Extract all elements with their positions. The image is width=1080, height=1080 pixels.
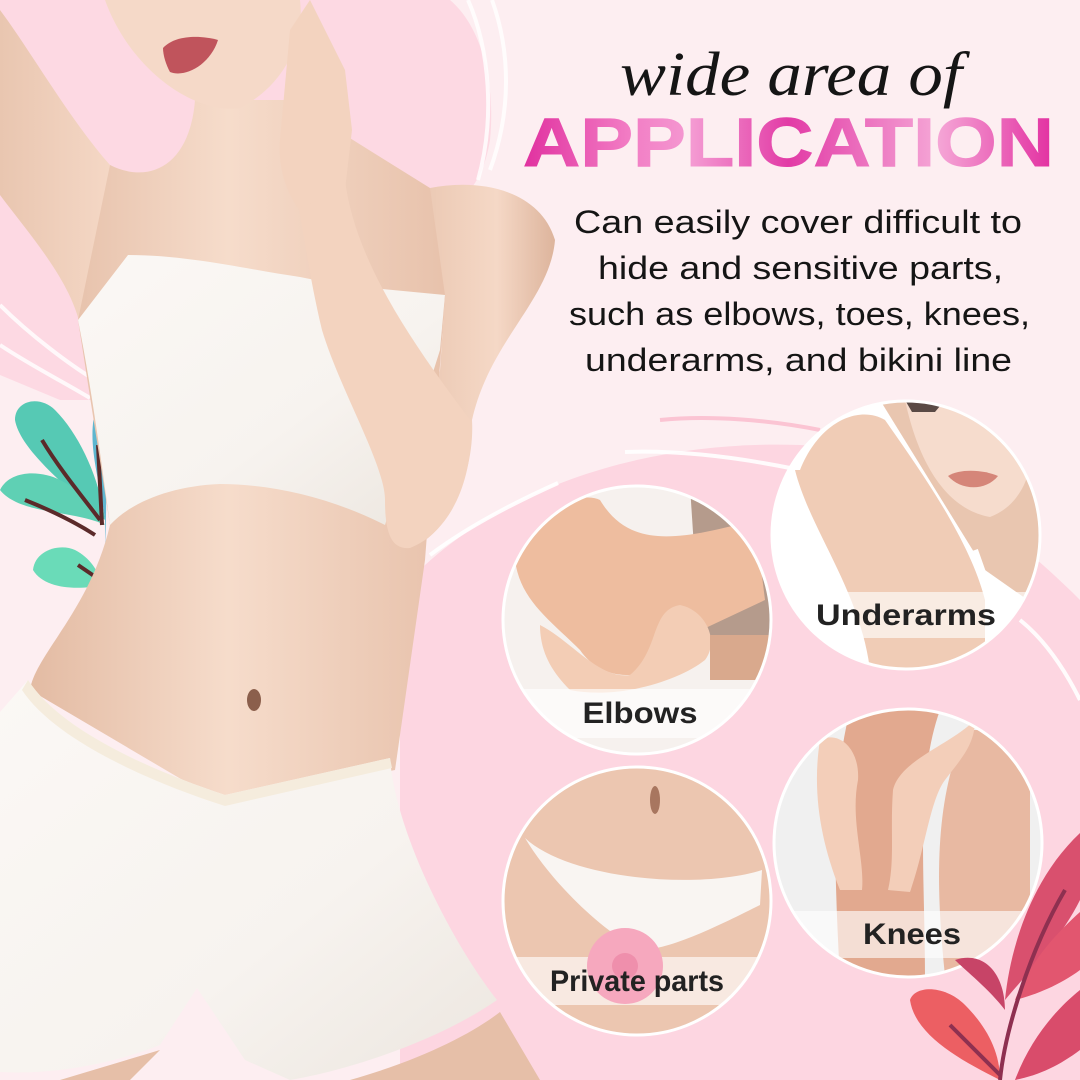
raised arm	[0, 10, 190, 325]
description text: underarms, and bikini line	[585, 342, 1012, 378]
description text: such as elbows, toes, knees,	[569, 296, 1030, 332]
description text: hide and sensitive parts,	[598, 250, 1003, 286]
description text: Can easily cover difficult to	[574, 204, 1022, 240]
shorts	[0, 680, 497, 1080]
title	[523, 41, 1054, 181]
icon: red leaves	[910, 833, 1080, 1080]
description text	[569, 204, 1030, 378]
circle: underarms	[770, 400, 1042, 672]
torso	[30, 100, 470, 805]
title line: wide area of: wide area of	[620, 41, 971, 109]
circle: private parts	[503, 767, 771, 1035]
navel	[247, 689, 261, 711]
hand	[280, 0, 352, 208]
forearm	[298, 180, 471, 548]
circle: knees	[774, 709, 1042, 980]
waistband	[22, 680, 392, 806]
face	[105, 0, 301, 109]
lips	[163, 37, 218, 73]
circle: elbows: Elbows	[582, 697, 698, 730]
icon: teal leaves	[0, 401, 106, 588]
top garment	[78, 255, 445, 525]
circle: elbows	[503, 486, 771, 754]
title line: APPLICATION: APPLICATION	[523, 104, 1054, 181]
upper arm	[410, 185, 555, 548]
circle: knees: Knees	[863, 918, 961, 951]
model figure	[0, 0, 555, 1080]
circle: private parts: Private parts	[550, 965, 724, 998]
leg	[60, 1012, 540, 1080]
circle: underarms: Underarms	[816, 599, 996, 632]
